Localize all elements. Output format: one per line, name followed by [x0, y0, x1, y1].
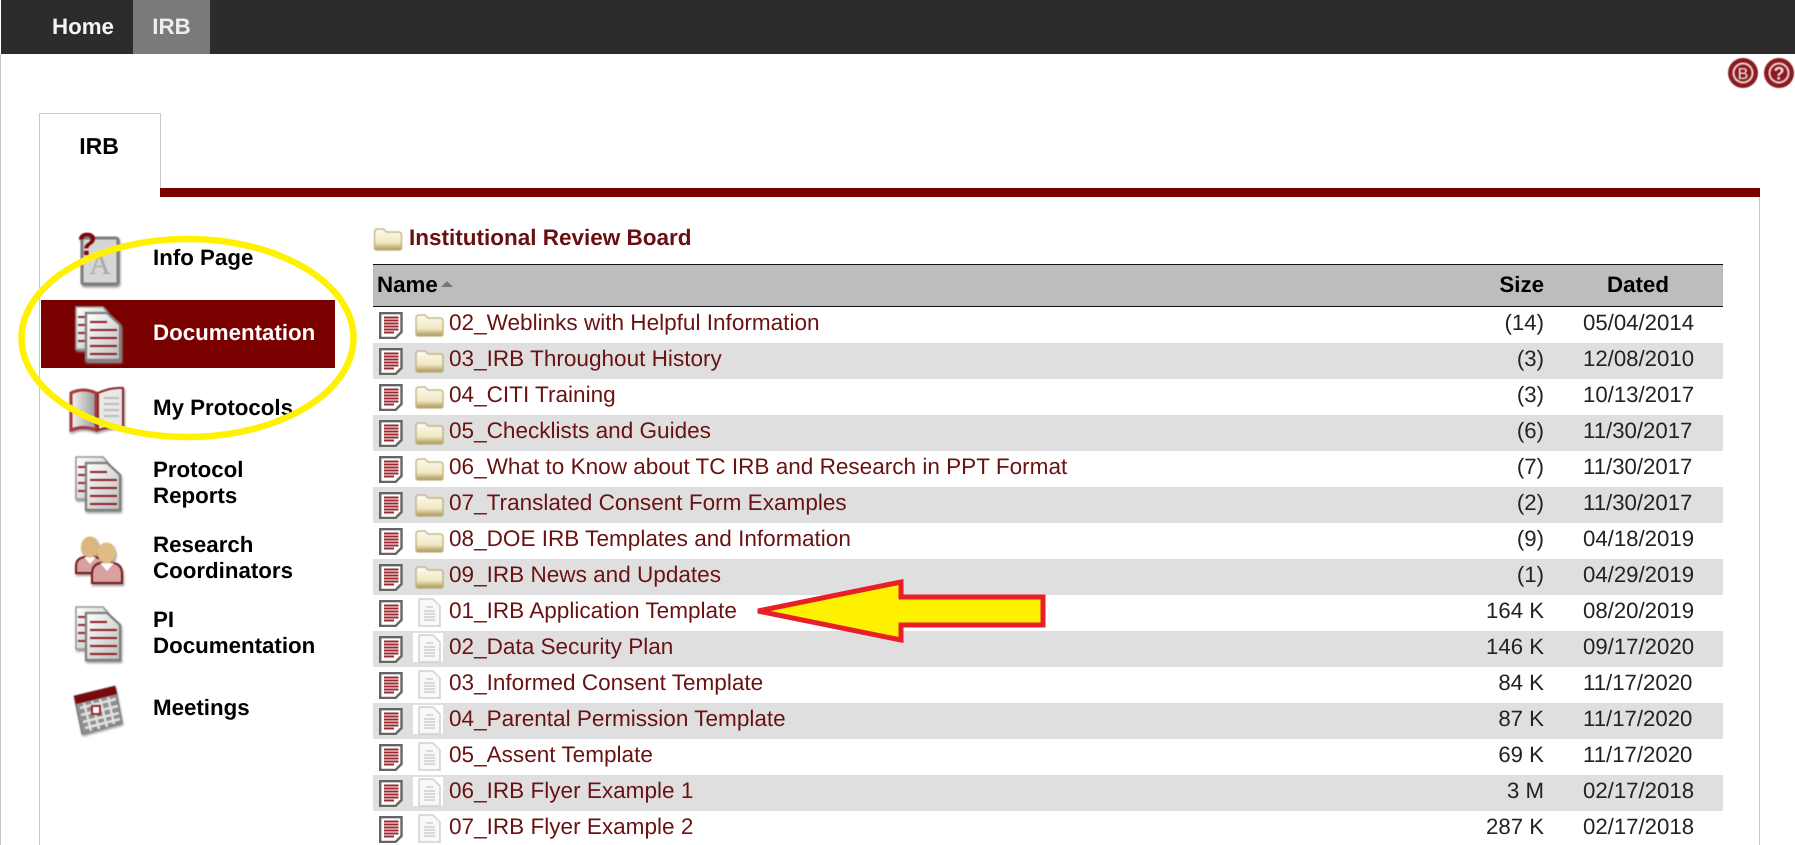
- row: 04_CITI Training: (3): [1517, 382, 1544, 407]
- icon: bookmark button: [1727, 57, 1759, 89]
- row: 06_What to Know: 06_What to Know about TC IRB and Research in PPT Format: [449, 454, 1067, 479]
- active item background: [41, 300, 335, 368]
- nav item: Protocol Reports: Protocol: [153, 457, 243, 482]
- maroon rule: [160, 188, 1760, 197]
- row: 06_IRB Flyer Example 1: 02/17/2018: [1583, 778, 1694, 803]
- row: 07_Translated Consent: 07_Translated Consent Form Examples: [449, 490, 847, 515]
- column: Size: Size: [1499, 272, 1544, 297]
- row: 03_IRB Throughout History: 03_IRB Throughout History: [449, 346, 722, 371]
- nav item: My Protocols: My Protocols: [153, 395, 293, 420]
- nav item: Protocol Reports: Reports: [153, 483, 237, 508]
- row: 07_Translated Consent: (2): [1517, 490, 1544, 515]
- row: 03_Informed Consent Template: [379, 670, 1692, 699]
- row: 03_IRB Throughout History: 12/08/2010: [1583, 346, 1694, 371]
- row: 04_Parental Permission Template: [373, 703, 1723, 739]
- icon: meetings calendar: [72, 684, 125, 738]
- nav tab: IRB active: IRB: [152, 14, 191, 39]
- row: 04_CITI Training: 10/13/2017: [1583, 382, 1694, 407]
- row: 07_Translated Consent: [373, 487, 1723, 523]
- row: 09_IRB News: 09_IRB News and Updates: [449, 562, 721, 587]
- row: 05_Checklists and Guides: [373, 415, 1723, 451]
- arrow: pointing to 01_IRB Application Template: [758, 579, 1046, 643]
- nav item: Research Coordinators: Research: [153, 532, 253, 557]
- nav item: PI Documentation: [153, 607, 315, 658]
- nav item: Protocol Reports: [153, 457, 243, 508]
- icon: PI documentation: [74, 606, 124, 665]
- icon: bookmark button: B: [1738, 66, 1748, 83]
- row: 04_Parental Permission Template: 04_Parental Permission Template: [449, 706, 786, 731]
- row: 07_Translated Consent: 11/30/2017: [1583, 490, 1692, 515]
- row: 07_IRB Flyer Example 2: 02/17/2018: [1583, 814, 1694, 839]
- row: 02_Weblinks: [379, 310, 1694, 339]
- row: 04_CITI Training: 04_CITI Training: [449, 382, 616, 407]
- row: 09_IRB News: 04/29/2019: [1583, 562, 1694, 587]
- nav item: PI Documentation: Documentation: [153, 633, 315, 658]
- row: 01_IRB Application Template: [379, 598, 1694, 627]
- icon: info page: [77, 232, 122, 289]
- row: 02_Weblinks: (14): [1505, 310, 1544, 335]
- icon: open book: [68, 386, 126, 435]
- icon: title folder: [373, 228, 403, 252]
- row: 07_IRB Flyer Example 2: 07_IRB Flyer Example 2: [449, 814, 693, 839]
- row: 04_Parental Permission Template: 11/17/2020: [1583, 706, 1692, 731]
- row: 07_IRB Flyer Example 2: 287 K: [1486, 814, 1544, 839]
- row: 03_Informed Consent Template: 84 K: [1498, 670, 1544, 695]
- callout: yellow ellipse around sidebar items: [18, 236, 357, 440]
- row: 06_What to Know: [379, 454, 1692, 483]
- icon: protocol reports: [74, 456, 124, 515]
- row: 08_DOE IRB Templates: 08_DOE IRB Templates and Information: [449, 526, 851, 551]
- tab outline: [39, 113, 161, 189]
- row: 02_Data Security Plan: 02_Data Security Plan: [449, 634, 673, 659]
- row: 03_IRB Throughout History: [373, 343, 1723, 379]
- row: 05_Assent Template: 05_Assent Template: [449, 742, 653, 767]
- nav item: PI Documentation: PI: [153, 607, 174, 632]
- row: 09_IRB News: [373, 559, 1723, 595]
- row: 06_IRB Flyer Example 1: 3 M: [1507, 778, 1544, 803]
- row: 01_IRB Application Template: 01_IRB Application Template: [449, 598, 737, 623]
- icon: info page: A: [89, 248, 111, 281]
- row: 02_Data Security Plan: 09/17/2020: [1583, 634, 1694, 659]
- icon: documentation: [74, 306, 124, 365]
- nav item: Research Coordinators: [153, 532, 293, 583]
- nav item: Research Coordinators: Coordinators: [153, 558, 293, 583]
- column: Dated: Dated: [1607, 272, 1669, 297]
- row: 05_Checklists and Guides: (6): [1517, 418, 1544, 443]
- row: 02_Data Security Plan: [373, 631, 1723, 667]
- nav item: Documentation: Documentation: [153, 320, 315, 345]
- nav tab: IRB active: [133, 0, 210, 54]
- row: 07_IRB Flyer Example 2: [379, 814, 1694, 843]
- nav item: Info Page: Info Page: [153, 245, 253, 270]
- nav tab: Home: Home: [52, 14, 114, 39]
- panel left border: [39, 188, 40, 845]
- left page edge: [0, 54, 1, 845]
- panel right border: [1759, 197, 1760, 845]
- sidebar navigation: [41, 300, 335, 368]
- row: 05_Checklists and Guides: 05_Checklists and Guides: [449, 418, 711, 443]
- row: 06_IRB Flyer Example 1: [373, 775, 1723, 811]
- row: 06_What to Know: 11/30/2017: [1583, 454, 1692, 479]
- row: 04_CITI Training: [379, 382, 1694, 411]
- column: Name: Name: [377, 272, 438, 297]
- row: 03_Informed Consent Template: 11/17/2020: [1583, 670, 1692, 695]
- row: 05_Assent Template: 11/17/2020: [1583, 742, 1692, 767]
- row: 01_IRB Application Template: 08/20/2019: [1583, 598, 1694, 623]
- row: 02_Weblinks: 05/04/2014: [1583, 310, 1694, 335]
- row: 05_Assent Template: [379, 742, 1692, 771]
- top navigation bar: [1, 0, 1795, 54]
- page title: Institutional Review Board: [409, 225, 692, 250]
- row: 08_DOE IRB Templates: [379, 526, 1694, 555]
- icon: help button: ?: [1774, 64, 1784, 84]
- row: 03_Informed Consent Template: 03_Informed Consent Template: [449, 670, 763, 695]
- tab label: IRB: [79, 133, 119, 159]
- icon: research coordinators: [74, 536, 126, 588]
- row: 06_What to Know: (7): [1517, 454, 1544, 479]
- sort arrow: [441, 281, 453, 287]
- row: 01_IRB Application Template: 164 K: [1486, 598, 1544, 623]
- row: 04_Parental Permission Template: 87 K: [1498, 706, 1544, 731]
- row: 08_DOE IRB Templates: 04/18/2019: [1583, 526, 1694, 551]
- row: 02_Data Security Plan: 146 K: [1486, 634, 1544, 659]
- row: 05_Assent Template: 69 K: [1498, 742, 1544, 767]
- row: 03_IRB Throughout History: (3): [1517, 346, 1544, 371]
- table header: [373, 264, 1723, 307]
- nav item: Meetings: Meetings: [153, 695, 250, 720]
- row: 09_IRB News: (1): [1517, 562, 1544, 587]
- row: 06_IRB Flyer Example 1: 06_IRB Flyer Example 1: [449, 778, 693, 803]
- icon: help button: [1763, 57, 1795, 89]
- row: 02_Weblinks: 02_Weblinks with Helpful Information: [449, 310, 820, 335]
- row: 08_DOE IRB Templates: (9): [1517, 526, 1544, 551]
- row: 05_Checklists and Guides: 11/30/2017: [1583, 418, 1692, 443]
